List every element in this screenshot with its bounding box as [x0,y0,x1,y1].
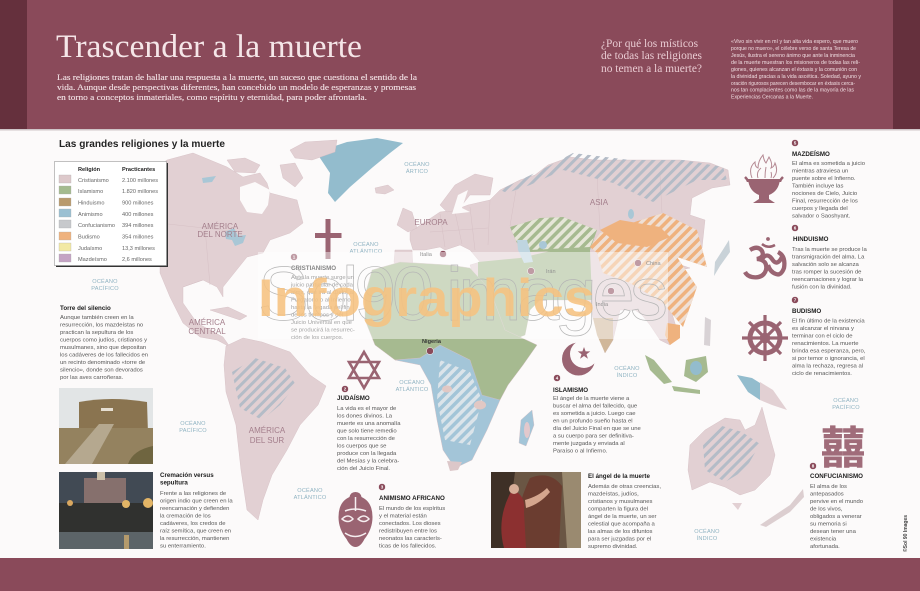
icon: crescent and star [562,340,598,376]
South America [224,338,326,520]
block: judaísmo: 2 [344,387,347,392]
block: judaísmo: ción del Juicio Final. [337,466,390,472]
block: cristianismo: alma, que irá al Cielo, al [291,290,354,296]
block: animismo africano: redistribuyen entre los [379,528,437,534]
block: islamismo: es sometida a juicio. Luego cae [553,411,636,417]
mystics paragraph [731,39,862,100]
block: judaísmo: con la resurrección de [337,436,396,442]
ocean labels: ÍNDICO [697,535,718,542]
mystics paragraph: la divinidad gracias a la vida ascética. Soledad, ayuno y [731,74,862,80]
block: cremación versus sepultura: raíz semítica, que creen en [160,528,231,534]
block: judaísmo: muerte es una anomalía [337,421,401,427]
place markers: Italia [420,252,433,258]
block: budismo: El fin último de la existencia [792,318,865,324]
block: el ángel de la muerte: El ángel de la muerte [588,473,650,480]
icon: double happiness: 囍 [821,424,865,473]
legend: Religión [78,167,101,173]
block: judaísmo [337,386,401,472]
block: hinduismo: Tras la muerte se produce la [792,247,867,253]
mystics paragraph: nos tan complacientes como las de la mayoría de las [731,88,855,94]
block: confucianismo: obligados a venerar [810,514,862,520]
block: torre del silencio: por las aves carroñeras. [60,375,124,381]
block: el ángel de la muerte: ángel de la muerte, un ser [588,514,656,520]
block: mazdeísmo [792,140,866,220]
ocean labels: OCÉANO [694,528,720,535]
block: animismo africano: 3 [381,485,384,490]
ocean labels: PACÍFICO [832,404,860,411]
continent labels: EUROPA [414,218,448,227]
Caspian sea [517,240,533,263]
block: cremación versus sepultura: Frente a las religiones de [160,491,227,497]
block: islamismo [553,374,641,454]
photo: cremation ghat [59,472,153,549]
legend: 900 millones [122,200,154,206]
block: judaísmo: produce con la llegada [337,451,397,457]
ocean labels: OCÉANO [399,379,425,386]
India [593,318,613,353]
ocean labels: ATLÁNTICO [294,494,327,501]
block: animismo africano: ticas de los fallecidos. [379,544,437,550]
block: cristianismo: Ante la muerte surge un [291,275,354,281]
block: mazdeísmo: Final, resurrección de los [792,198,858,204]
intro paragraph: en torno a conceptos inmateriales, como espíritu y eternidad, para poder afrontarla. [57,92,367,102]
place markers: Irán [546,269,556,275]
block: animismo africano: neonatos las caracterís- [379,536,442,542]
legend: Hinduismo [78,200,104,206]
block: cristianismo: juicio particular de cada [290,282,354,288]
question heading: ¿Por qué los místicos [601,36,698,50]
block: animismo africano: El mundo de los espíritus [379,506,445,512]
world map [160,138,804,527]
block: torre del silencio: los cadáveres de los fallecidos en [60,352,148,358]
block: confucianismo: desean tener una [810,529,857,535]
mystics paragraph: oración rigurosos parecen desembocar en éxtasis cerca- [731,81,855,87]
continent labels: DEL NORTE [197,230,243,239]
block: cristianismo [290,254,355,341]
legend: Judaísmo [78,246,102,252]
block: mazdeísmo: MAZDEÍSMO [792,150,830,158]
block: confucianismo: 8 [812,464,815,469]
block: cremación versus sepultura: origen indio que creen en la [160,498,233,504]
ocean labels: ÍNDICO [617,372,638,379]
block: islamismo: día del Juicio Final en que se une [553,426,641,432]
legend: 394 millones [122,223,154,229]
block: mazdeísmo: puente sobre el Infierno. [792,176,856,182]
block: confucianismo: El alma de los [810,484,847,490]
block: el ángel de la muerte [588,473,661,550]
block: mazdeísmo: salvador o Saoshyant. [792,214,851,220]
mystics paragraph: «Vivo sin vivir en mí y tan alta vida espero, que muero [731,39,858,45]
block: hinduismo: reencarnaciones y lograr la [792,277,864,283]
block: el ángel de la muerte: comparten la figura del [588,506,648,512]
mystics paragraph: giones, quienes alcanzan el éxtasis y la comunión con [731,67,857,73]
block: judaísmo: los cuerpos que se [337,444,387,450]
Africa [365,262,537,471]
block: budismo [792,296,866,377]
icon: star of David [349,352,379,388]
legend: Confucianismo [78,223,115,229]
block: budismo: ciclo de renacimientos. [792,371,852,377]
block: cremación versus sepultura: la resurrección, mantienen [160,536,229,542]
continent labels [188,198,609,445]
block: torre del silencio: practican la sepultura de los [60,330,133,336]
icon: dharma wheel [742,315,788,361]
block: cristianismo: Juicio Universal en que [291,320,353,326]
Russia hatch [500,153,727,202]
block: judaísmo: los dones divinos. La [337,414,393,420]
ocean labels: ATLÁNTICO [396,386,429,393]
block: cremación versus sepultura [160,472,233,550]
block: hinduismo: salvación solo se alcanza [792,262,860,268]
legend: 1.820 millones [122,189,158,195]
block: budismo: alma la rechaza, regresa al [792,364,863,370]
question heading: de todas las religiones [601,48,702,62]
legend: 13,3 millones [122,246,155,252]
block: el ángel de la muerte: Además de otras creencias, [588,484,661,490]
block: cristianismo: CRISTIANISMO [291,265,336,272]
block: cristianismo: hasta la llegada del fin [291,305,350,311]
block: hinduismo: tras romper la sucesión de [792,270,862,276]
block: mazdeísmo: El alma es sometida a juicio [792,161,866,167]
ocean labels: OCÉANO [297,487,323,494]
icon: African mask [338,492,372,547]
legend: 354 millones [122,234,154,240]
Australia [688,407,804,527]
mystics paragraph: de la muerte muestran los misioneros de todas las reli- [731,60,860,66]
watermark orange wordmark: Infographics [258,269,595,328]
block: el ángel de la muerte: para ser juzgadas por el [588,536,651,542]
mystics paragraph: porque no muero», el célebre verso de santa Teresa de [731,46,856,52]
continent labels: CENTRAL [188,327,226,336]
block: budismo: brinda esa esperanza, pero, [792,348,866,354]
block: confucianismo: pervive en el mundo [810,499,864,505]
footer band [0,558,920,591]
block: torre del silencio: Aunque también creen en la [60,315,134,321]
legend: Budismo [78,234,100,240]
block: el ángel de la muerte: supremo divinidad. [588,544,638,550]
Mongolia [600,220,670,247]
legend: 2,6 millones [122,257,152,263]
intro paragraph: Las religiones tratan de hallar una respuesta a la muerte, un suceso que cuestiona el sentido de la [57,72,417,82]
block: hinduismo: transmigración del alma. La [792,254,865,260]
header band [0,0,920,130]
icon: sacred fire [745,155,783,203]
legend: 400 millones [122,212,154,218]
block: islamismo: buscar el alma del fallecido, que [553,404,638,410]
block: el ángel de la muerte: mazdeístas, judíos, [588,492,639,498]
North America [160,140,394,347]
block: cristianismo: Purgatorio o al Infierno, [291,298,353,304]
block: torre del silencio: Torre del silencio [60,305,111,312]
block: animismo africano: y el material están [379,514,427,520]
block: confucianismo: de los vivos, [810,506,843,512]
legend: Mazdeísmo [78,257,107,263]
China hatch [590,213,707,327]
map heading: Las grandes religiones y la muerte [59,138,225,150]
block: cremación versus sepultura: la cremación de los [160,514,211,520]
block: cremación versus sepultura: sepultura [160,480,188,486]
title: Trascender a la muerte [56,29,362,65]
block: cremación versus sepultura: su enterramiento. [160,544,206,550]
ocean labels: ATLÁNTICO [350,248,383,255]
block: islamismo: 4 [556,376,559,381]
continent labels: AMÉRICA [202,222,239,231]
block: budismo: si por temor o ignorancia, el [792,356,865,362]
block: mazdeísmo: cuerpos y llegada del [792,206,848,212]
legend: Islamismo [78,189,103,195]
block: hinduismo [792,224,867,290]
continent labels: AMÉRICA [189,318,226,327]
continent labels: AMÉRICA [249,426,286,435]
block: judaísmo: La vida es el mayor de [337,406,397,412]
painting: angel of death [491,472,581,548]
place markers [420,250,662,354]
question heading: no temen a la muerte? [601,61,702,75]
ocean labels: ÁRTICO [406,168,429,175]
block: cremación versus sepultura: cadáveres, los credos de [160,521,226,527]
block: confucianismo [810,462,864,550]
Baltic sea [452,190,470,214]
block: torre del silencio: musulmanes, sino que depositan [60,345,146,351]
block: cristianismo: se producirá la resurrec- [291,328,355,334]
Lake Baikal and Aral [539,209,634,249]
block: el ángel de la muerte: las almas de los difuntos [588,529,653,535]
block: cremación versus sepultura: reencarnación y defienden [160,506,229,512]
question heading [601,36,702,75]
block: confucianismo: CONFUCIANISMO [810,473,863,480]
ocean labels: OCÉANO [614,365,640,372]
ocean labels: PACÍFICO [91,285,119,292]
mystics paragraph: Experiencias Cercanas a la Muerte. [731,94,813,100]
block: mazdeísmo: nociones de Cielo, Juicio [792,191,858,197]
watermark outlined wordmark: Sol90 images [258,252,668,337]
Eurasia [394,157,730,353]
block: animismo africano [378,484,445,550]
block: islamismo: Paraíso o al Infierno. [553,448,608,454]
icon: cross [315,219,342,259]
ocean labels: PACÍFICO [179,427,207,434]
block: cristianismo: de los tiempos y del [291,312,343,318]
block: confucianismo: antepasados [810,492,844,498]
legend [54,162,168,267]
Middle East green [478,250,592,345]
intro paragraph [57,72,417,102]
block: torre del silencio: un recinto denominado «torre de [60,360,146,366]
block: cristianismo: 1 [293,255,296,260]
block: el ángel de la muerte: cristianos y musulmanes [588,499,653,505]
block: cremación versus sepultura: Cremación versus [160,472,214,479]
block: torre del silencio: cuerpos como judíos, cristianos y [60,338,147,344]
ocean labels: OCÉANO [404,161,430,168]
ocean labels [91,161,860,542]
ocean labels: OCÉANO [92,278,118,285]
block: judaísmo: del Mesías y la celebra- [337,458,399,464]
block: budismo: terminar con el ciclo de [792,334,853,340]
ocean labels: OCÉANO [353,241,379,248]
mystics paragraph: Jesús, ilustra el sereno ánimo que ante la inminencia [731,53,855,59]
place markers: Nigeria [422,339,442,345]
block: budismo: es alcanzar el nirvana y [792,326,854,332]
intro paragraph: vida. Aunque desde perspectivas diferentes, han concebido un modelo de esperanzas y promesas [57,82,416,92]
block: torre del silencio: resurrección, los mazdeístas no [60,322,144,328]
block: islamismo: mente juzgada y enviada al [553,441,625,447]
photo: tower of silence [59,388,153,464]
block: islamismo: a su cuerpo para ser definitiva- [553,434,634,440]
image credit: ©Sol 90 Images [902,515,909,552]
block: confucianismo: existencia [810,536,837,542]
block: cristianismo: ción de los cuerpos. [291,335,344,341]
block: hinduismo: 6 [794,226,797,231]
block: mazdeísmo: También incluye las [792,184,843,190]
SE Asia orange [665,323,680,345]
legend: Animismo [78,212,103,218]
block: hinduismo: fusión con la divinidad. [792,284,852,290]
block: budismo: 7 [794,298,797,303]
block: islamismo: El ángel de la muerte viene a [553,396,630,402]
block: torre del silencio: silencio», donde son devorados [60,368,143,374]
block: confucianismo: afortunada. [810,544,840,550]
legend: Cristianismo [78,178,109,184]
block: islamismo: en un profundo sueño hasta el [553,418,633,424]
block: mazdeísmo: mientras atraviesa un [792,168,848,174]
watermark overlay panel [258,252,668,339]
block: el ángel de la muerte: celestial que acompaña a [588,522,656,528]
block: budismo: BUDISMO [792,308,821,315]
block: hinduismo: HINDUISMO [793,236,829,243]
icon: om [745,238,784,277]
block: confucianismo: su memoria si [810,522,847,528]
legend: 2.100 millones [122,178,158,184]
place markers: India [596,302,609,308]
continent labels: ASIA [590,198,609,207]
Southeast Asia islands [645,240,787,410]
block: budismo: renacimientos. La muerte [792,341,859,347]
block: islamismo: ISLAMISMO [553,387,588,394]
ocean labels: OCÉANO [833,397,859,404]
block: judaísmo: JUDAÍSMO [337,394,370,402]
legend: Practicantes [122,167,155,173]
block: animismo africano: conectados. Los dioses [379,521,441,527]
place markers: China [646,261,662,267]
Greenland [317,138,403,202]
block: torre del silencio [60,305,148,381]
block: mazdeísmo: 5 [794,141,797,146]
Central Asia hatch [510,217,597,252]
block: judaísmo: que solo tiene remedio [337,428,397,434]
ocean labels: OCÉANO [180,420,206,427]
continent labels: DEL SUR [250,436,284,445]
block: animismo africano: ANIMISMO AFRICANO [379,495,445,502]
